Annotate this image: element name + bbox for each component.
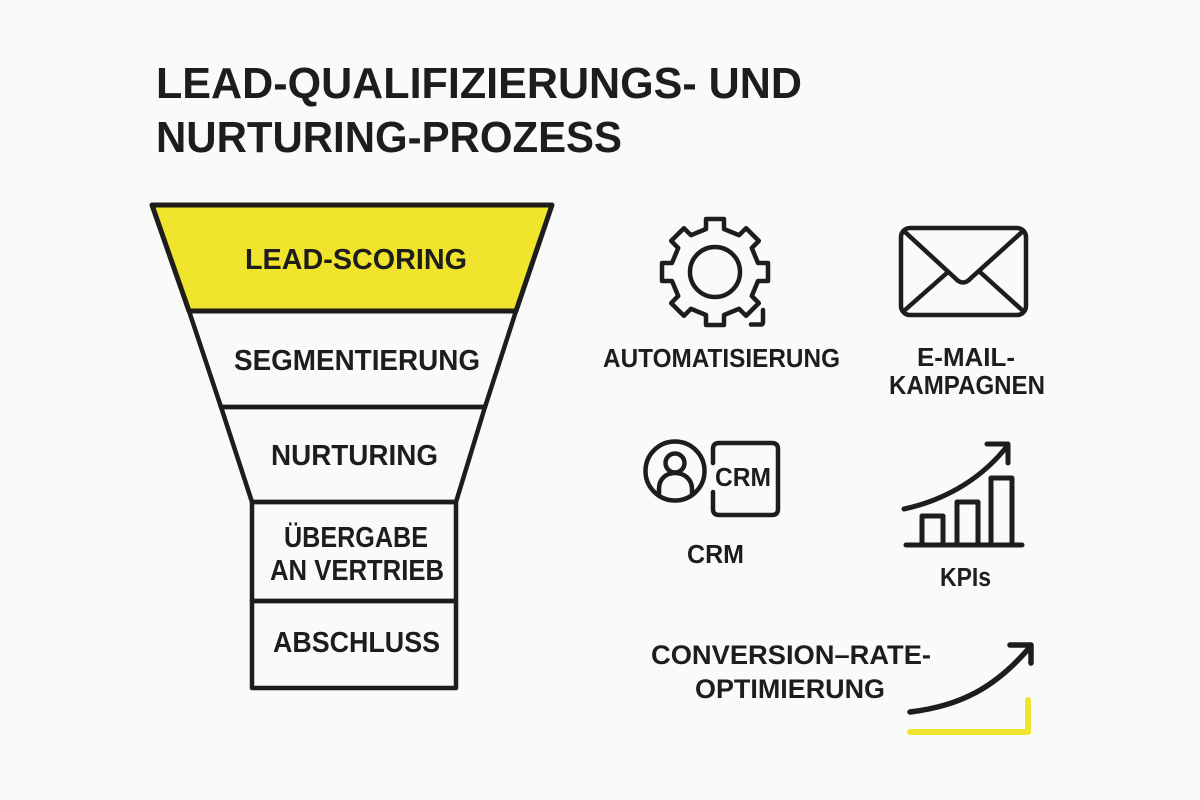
label: E-Mail-Kampagnen: KAMPAGNEN <box>889 372 1045 400</box>
title <box>156 60 802 162</box>
label: CRM: CRM <box>687 541 744 569</box>
label: Conversion-Rate-Optimierung: OPTIMIERUNG <box>695 674 885 704</box>
label: Conversion-Rate-Optimierung: CONVERSION–RATE- <box>651 640 931 670</box>
icon: KPI bar chart <box>904 444 1022 545</box>
label: E-Mail-Kampagnen <box>889 344 1045 400</box>
icon: gear <box>662 219 768 325</box>
funnel stage: Nurturing <box>221 407 485 502</box>
label: E-Mail-Kampagnen: E-MAIL- <box>917 344 1015 372</box>
funnel stage: Nurturing: NURTURING <box>271 440 438 472</box>
funnel diagram <box>152 205 552 688</box>
funnel stage: Segmentierung: SEGMENTIERUNG <box>234 345 480 377</box>
funnel stage: Übergabe an Vertrieb <box>252 502 456 601</box>
icon: CRM contact: CRM <box>715 462 771 492</box>
icon: envelope <box>901 228 1026 315</box>
funnel stage: Segmentierung <box>189 311 516 407</box>
funnel stage: Lead-Scoring <box>152 205 552 311</box>
title: LEAD-QUALIFIZIERUNGS- UND <box>156 60 802 108</box>
funnel stage: Übergabe an Vertrieb: AN VERTRIEB <box>270 555 444 587</box>
label: Automatisierung: AUTOMATISIERUNG <box>603 345 840 373</box>
icon: conversion growth arrow <box>910 645 1031 732</box>
funnel stage: Lead-Scoring: LEAD-SCORING <box>245 244 467 276</box>
label: Conversion-Rate-Optimierung <box>651 640 931 704</box>
funnel stage: Übergabe an Vertrieb: ÜBERGABE <box>284 522 428 554</box>
label: KPIs: KPIs <box>940 564 991 592</box>
funnel stage: Abschluss <box>252 601 456 688</box>
icon: CRM contact <box>646 442 778 515</box>
title: NURTURING-PROZESS <box>156 114 622 162</box>
funnel stage: Abschluss: ABSCHLUSS <box>273 627 440 659</box>
